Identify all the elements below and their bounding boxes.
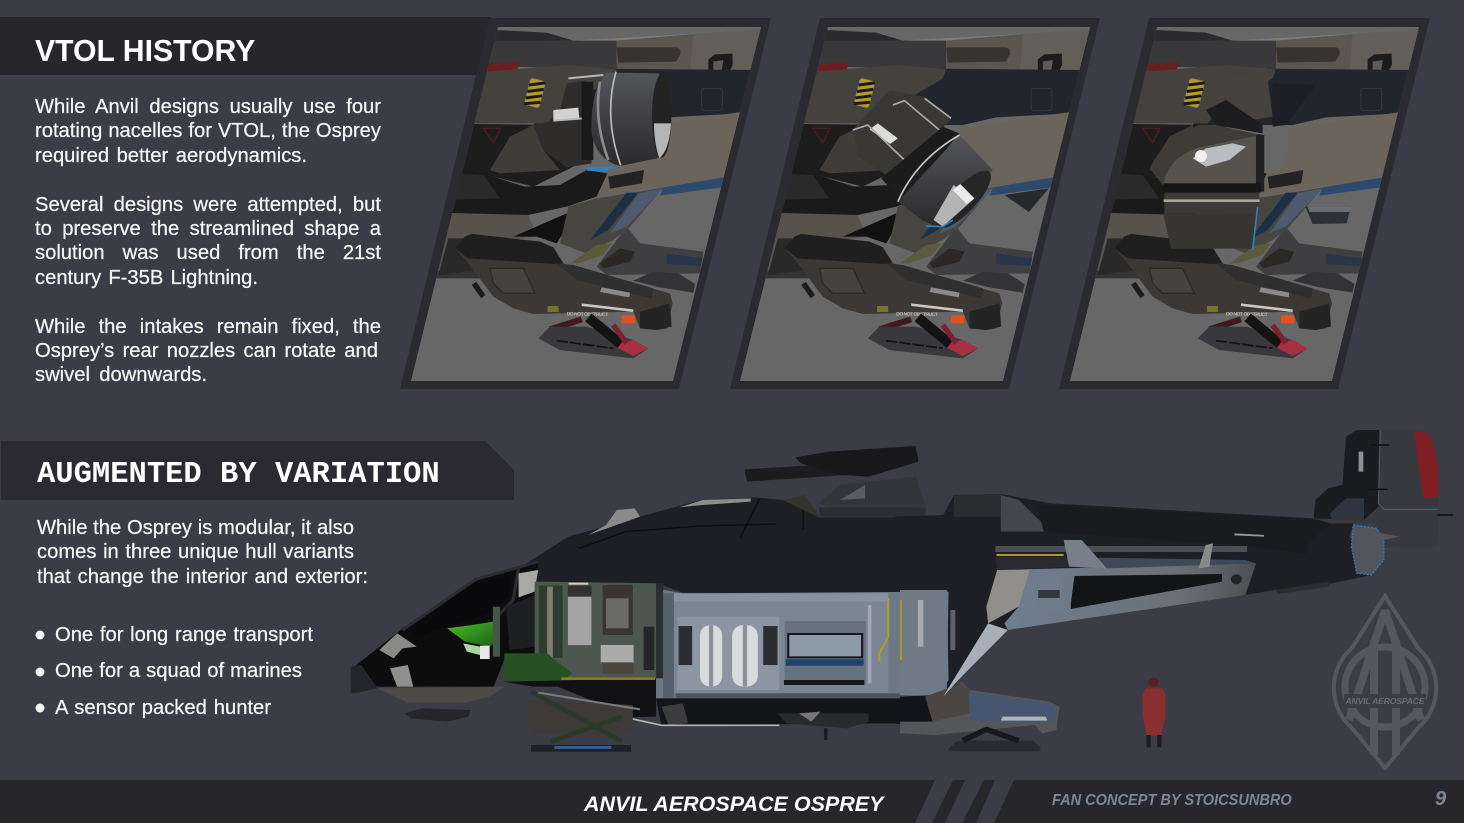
text block: VTOL history body: While Anvil designs usually use four xyxy=(35,96,381,118)
heading: Augmented by Variation: AUGMENTED BY VARIATION xyxy=(37,458,440,492)
bullet list: hull variants: A sensor packed hunter xyxy=(55,697,271,719)
text block: variation intro xyxy=(36,517,368,588)
text block: variation intro: While the Osprey is modular, it also xyxy=(37,517,354,539)
heading: VTOL History: VTOL HISTORY xyxy=(35,35,255,68)
illustration: Osprey cutaway side view xyxy=(351,430,1453,752)
heading band: VTOL history xyxy=(0,17,491,75)
bullet list: hull variants: One for long range transport xyxy=(55,624,313,646)
text block: VTOL history body: required better aerodynamics. xyxy=(35,145,307,167)
text block: VTOL history body: Several designs were attempted, but xyxy=(35,194,381,216)
text block: VTOL history body: rotating nacelles for VTOL, the Osprey xyxy=(35,120,381,142)
text block: variation intro: comes in three unique hull variants xyxy=(37,541,354,563)
logo: Anvil Aerospace watermark: ANVIL AEROSPACE xyxy=(1344,696,1425,706)
footer bar xyxy=(0,780,1464,823)
panel: nacelle mid rotation xyxy=(730,18,1100,389)
text block: VTOL history body: century F-35B Lightning. xyxy=(35,267,258,289)
text block: VTOL history body: Osprey’s rear nozzles can rotate and xyxy=(35,340,378,362)
text block: variation intro: that change the interior and exterior: xyxy=(37,566,368,588)
text block: VTOL history body xyxy=(34,96,382,386)
text block: VTOL history body: swivel downwards. xyxy=(35,364,207,386)
panel: nacelle rotated downward xyxy=(1059,18,1430,389)
footer title: ANVIL AEROSPACE OSPREY xyxy=(584,792,883,816)
logo: Anvil Aerospace watermark xyxy=(1334,596,1436,768)
bullet list: hull variants xyxy=(54,624,313,719)
panel: nacelle forward position xyxy=(400,18,771,389)
text block: VTOL history body: solution was used from the 21st xyxy=(35,242,381,264)
text block: VTOL history body: to preserve the streamlined shape a xyxy=(35,218,381,240)
bullet list: hull variants: One for a squad of marines xyxy=(55,660,302,682)
bullet markers xyxy=(36,630,44,712)
figure: person for scale xyxy=(1142,678,1165,747)
footer credit: FAN CONCEPT BY STOICSUNBRO xyxy=(1052,792,1292,809)
text block: VTOL history body: While the intakes remain fixed, the xyxy=(35,316,381,338)
page number: 9 xyxy=(1435,788,1446,810)
heading band: augmented by variation xyxy=(1,441,514,500)
